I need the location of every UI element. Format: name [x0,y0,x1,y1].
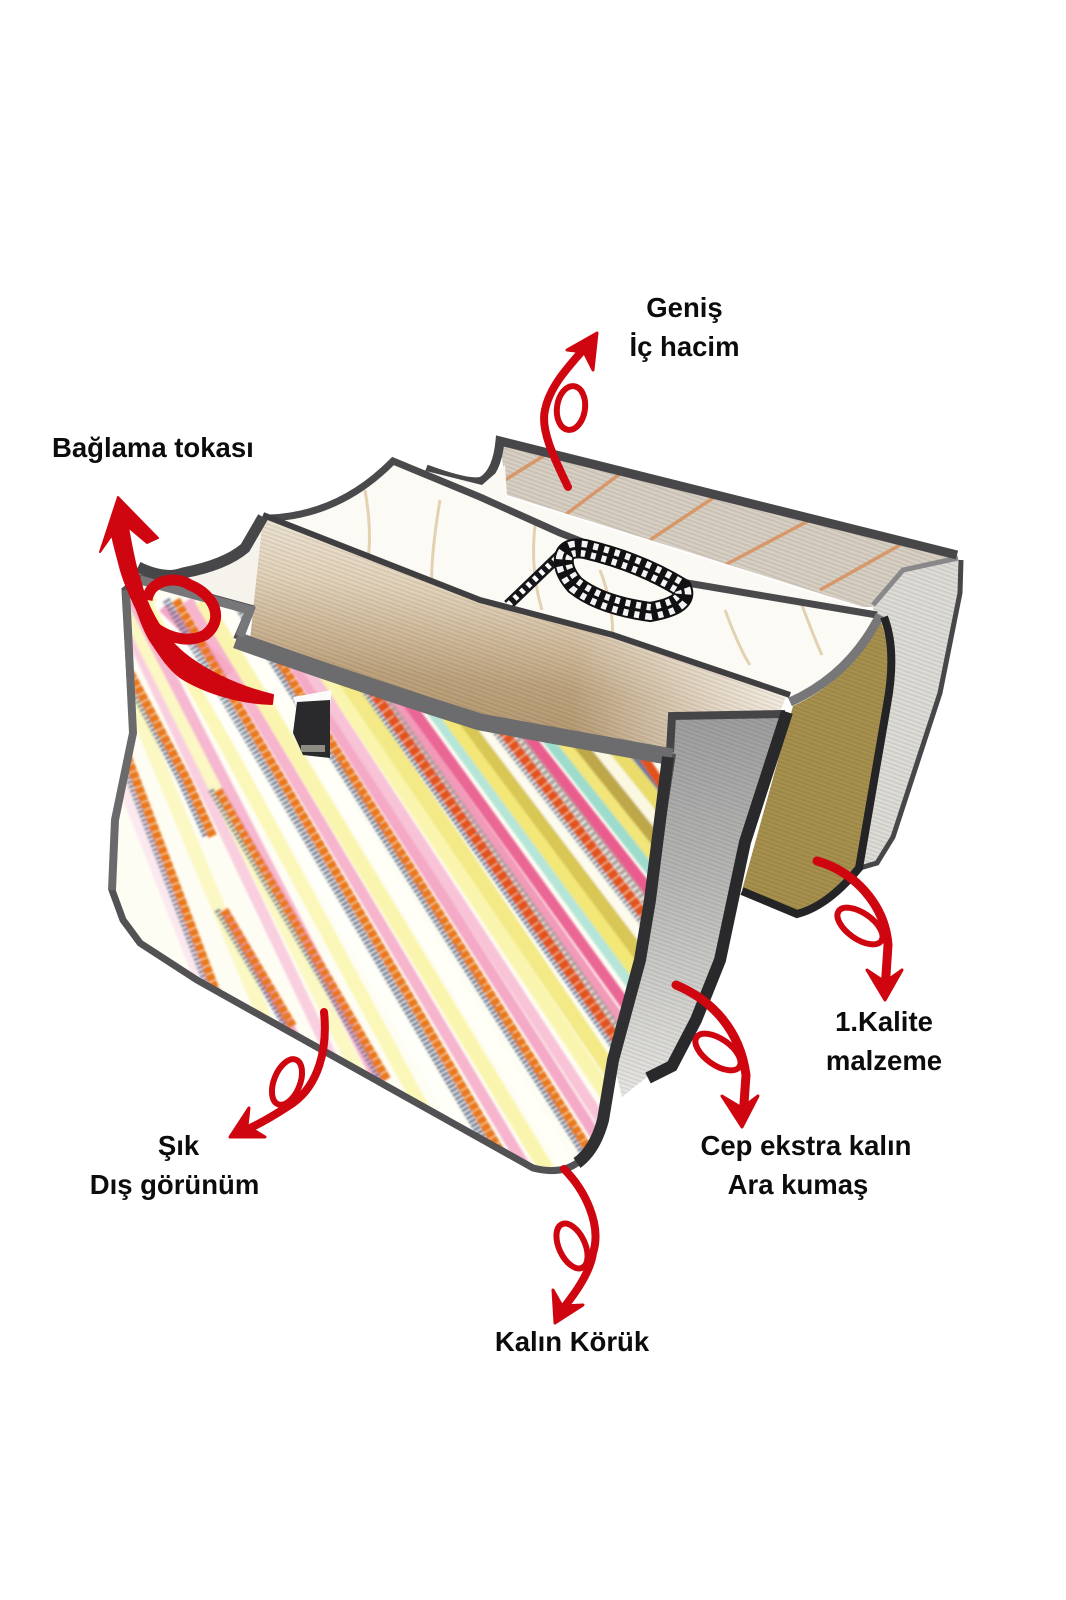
panel: white band [393,463,877,617]
pocket binding [112,578,672,1171]
base stripes, left to right [124,596,658,1168]
label: Geniş İç hacim: İç hacim [629,331,740,362]
arrow: 1.Kalite malzeme [817,861,902,1000]
grey melange stripes [382,700,645,1030]
label: Cep ekstra kalın Ara kumaş [701,1130,911,1200]
label: Cep ekstra kalın Ara kumaş: Ara kumaş [728,1169,868,1200]
label: Cep ekstra kalın Ara kumaş: Cep ekstra kalın [701,1130,911,1161]
panel: middle white lining [263,461,877,697]
panel: back inner lining [500,443,957,607]
arrow: Cep ekstra kalın [676,985,758,1127]
orange stripes [128,596,589,1150]
label: Geniş İç hacim: Geniş [646,292,723,323]
label: 1.Kalite malzeme [826,1006,942,1076]
label: Kalın Körük: Kalın Körük [495,1326,650,1357]
panel: grey side gusset [613,712,790,1097]
icon: checked rope handle [508,548,683,612]
strap back left [138,517,263,575]
arrow: Kalın Körük [550,1169,595,1323]
grey fuzz stripes [126,597,641,1154]
icon: plastic buckle [293,690,332,758]
label: Şık Dış görünüm: Dış görünüm [90,1169,259,1200]
label: Bağlama tokası: Bağlama tokası [52,432,254,463]
panel: tan inner lining [250,515,790,755]
arrow: Bağlama tokası [100,497,273,704]
bag [52,441,978,1180]
arrow: Geniş iç hacim [544,333,597,487]
panel: olive gusset [742,615,891,914]
arrow: Şık dış görünüm [230,1012,325,1137]
panel: striped front pocket [108,574,676,1174]
label: Geniş İç hacim [629,292,740,362]
label: Şık Dış görünüm: Şık [158,1130,200,1161]
label: 1.Kalite malzeme: malzeme [826,1045,942,1076]
back binding [426,441,957,555]
panel: left white lining [138,517,263,612]
label: Şık Dış görünüm [90,1130,259,1200]
short pale stripes on left [163,607,297,1040]
label: 1.Kalite malzeme: 1.Kalite [835,1006,933,1037]
panel: right outer gusset [858,558,961,868]
